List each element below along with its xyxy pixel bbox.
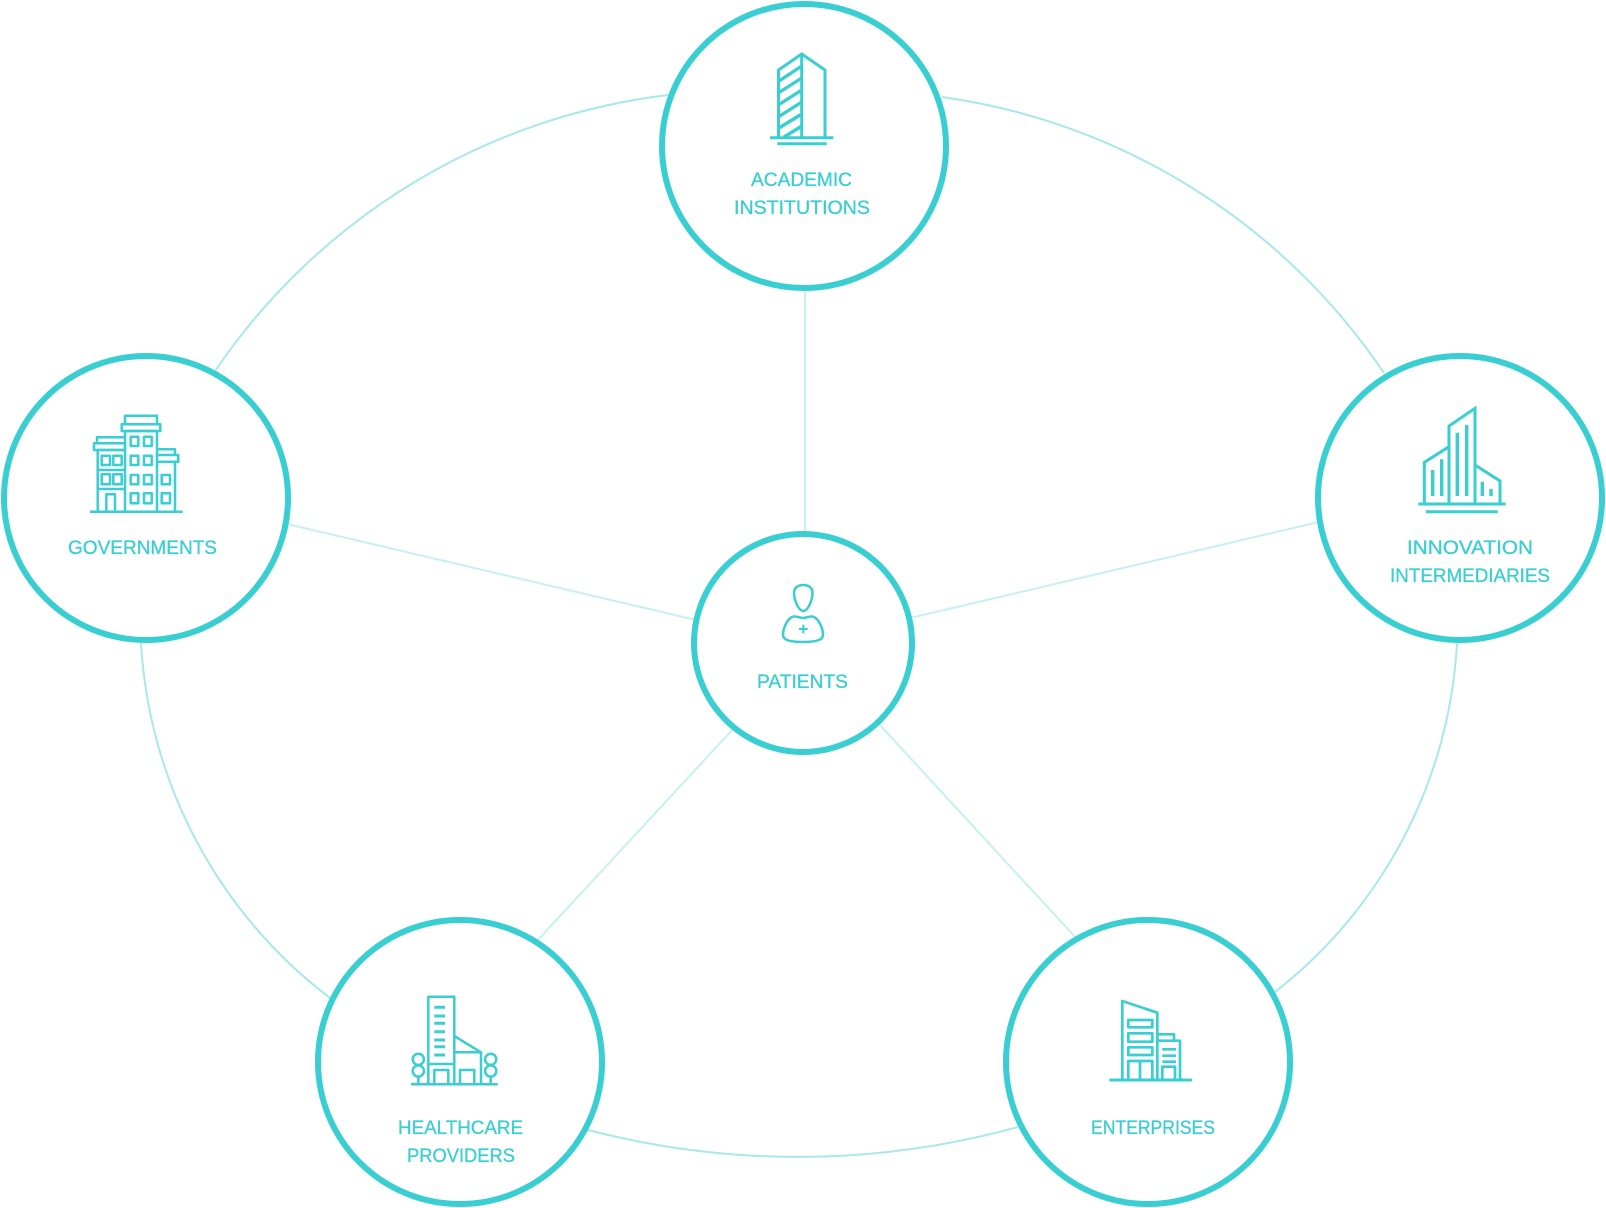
node: healthcare providers [318, 920, 602, 1204]
icon: hospital with trees [411, 997, 498, 1084]
node: governments [4, 356, 288, 640]
node: patients [694, 534, 912, 752]
label: innovation intermediaries: INTERMEDIARIES [1390, 565, 1550, 587]
label: academic institutions [734, 169, 870, 219]
icon: patient figure [783, 585, 823, 642]
node: enterprises [1006, 920, 1290, 1204]
label: healthcare providers: PROVIDERS [407, 1145, 515, 1167]
outer connecting arcs [141, 95, 1457, 1157]
label: academic institutions: INSTITUTIONS [734, 197, 870, 219]
icon: skyline [1418, 408, 1506, 512]
label: healthcare providers [398, 1117, 523, 1167]
label: innovation intermediaries [1390, 537, 1550, 587]
spokes to patients [287, 288, 1319, 942]
label: healthcare providers: HEALTHCARE [398, 1117, 523, 1139]
label: governments: GOVERNMENTS [68, 537, 217, 559]
label: enterprises: ENTERPRISES [1091, 1117, 1215, 1139]
icon: striped tower [770, 54, 833, 144]
icon: corporate buildings [1111, 1001, 1191, 1080]
label: patients: PATIENTS [757, 671, 848, 693]
node: academic institutions [662, 4, 946, 288]
label: innovation intermediaries: INNOVATION [1407, 537, 1533, 559]
icon: office block [90, 416, 183, 512]
label: academic institutions: ACADEMIC [751, 169, 852, 191]
node: innovation intermediaries [1318, 356, 1602, 640]
